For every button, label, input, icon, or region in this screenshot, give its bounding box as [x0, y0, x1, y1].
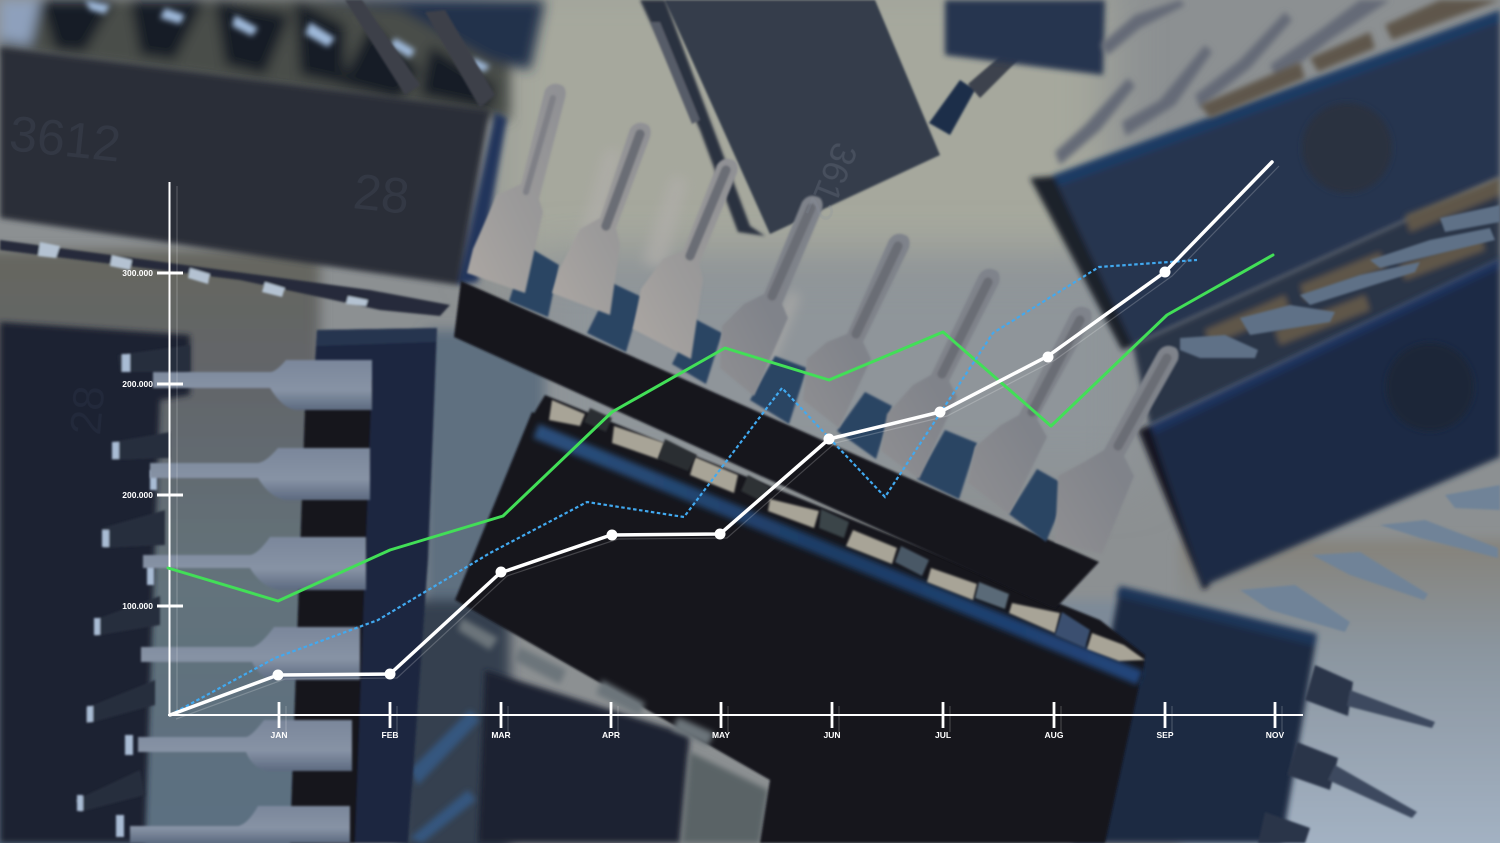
blurred blue pins left of bottom centre chip: [410, 710, 480, 843]
x-axis labels: JUL: [935, 730, 951, 740]
chip: top-left lower pins: [0, 240, 450, 316]
series: white line with markers: [170, 162, 1272, 715]
y-axis labels: 300.000: [122, 268, 153, 278]
embossed chip markings: 28: [61, 384, 114, 437]
x-axis labels: MAR: [491, 730, 511, 740]
chip: lower right navy body: [1138, 258, 1500, 590]
chip: lower central tan pins: [549, 400, 1145, 661]
y-axis ticks: [157, 273, 183, 606]
chip: left vertical pins: [130, 360, 372, 843]
chip: top-centre body: [640, 0, 940, 236]
top right brown pin bases: [1200, 0, 1500, 118]
axes: [168, 182, 1303, 716]
chip: left far dark body: [0, 322, 190, 843]
top-left pin highlights: [85, 0, 490, 72]
chip: lower central body: [455, 395, 1145, 843]
chip: left vertical body: [290, 328, 437, 843]
top-left row of dark pins: [0, 0, 545, 120]
chip: lower central blue edge: [536, 431, 1140, 678]
bottom centre grey patch: [682, 752, 768, 843]
top-left pin shafts in focus: [345, 0, 495, 108]
y-axis labels: [122, 268, 153, 611]
y-axis labels: 100.000: [122, 601, 153, 611]
chip: central upper blue windows: [509, 246, 1069, 542]
chip: bottom right body: [1072, 586, 1317, 843]
chip: central upper faded back pins: [575, 150, 800, 370]
embossed chip markings: [7, 105, 866, 437]
chip: left far pin shadows and glints: [76, 345, 190, 837]
x-axis labels: JAN: [270, 730, 288, 740]
bottom right dark pins: [1258, 665, 1435, 843]
top right grey pins: [1055, 0, 1390, 165]
chip: top small navy: [945, 0, 1105, 75]
x-axis labels: [270, 730, 1285, 740]
chip: pin band between right chips: [1133, 177, 1500, 425]
x-axis labels: FEB: [382, 730, 398, 740]
chip marking: upper right dimple: [1302, 103, 1392, 193]
chip: lower central underside pins: [458, 618, 714, 746]
x-axis labels: JUN: [823, 730, 841, 740]
chip: central upper metal pins: [467, 84, 1179, 554]
x-axis ticks: [279, 702, 1275, 728]
chip: upper right navy body: [1030, 10, 1500, 350]
chip: top-left grey body: [0, 47, 507, 285]
series: green line: [168, 255, 1273, 601]
embossed chip markings: 3612: [7, 105, 123, 173]
chip marking: lower right dimple: [1386, 343, 1474, 431]
embossed chip markings: 28: [351, 163, 412, 225]
chip: lower central dark pin squares: [584, 408, 1090, 648]
chip: central upper body: [454, 281, 1099, 609]
y-axis labels: 200.000: [122, 490, 153, 500]
x-axis labels: NOV: [1266, 730, 1285, 740]
ghost reflection of chart: [176, 166, 1282, 732]
y-axis labels: 200.000: [122, 379, 153, 389]
x-axis labels: APR: [602, 730, 620, 740]
bottom right blue pins: [1240, 485, 1500, 632]
chip: top-centre side pin: [929, 46, 1022, 135]
chip: central upper pin shaft shading: [526, 98, 1167, 446]
bottom centre chip: [478, 670, 690, 843]
series: blue dotted line: [170, 260, 1197, 715]
x-axis labels: SEP: [1156, 730, 1174, 740]
chip: pin band blue pins: [1180, 205, 1500, 358]
x-axis labels: MAY: [712, 730, 730, 740]
x-axis labels: AUG: [1045, 730, 1064, 740]
embossed chip markings: 3612: [798, 137, 866, 227]
